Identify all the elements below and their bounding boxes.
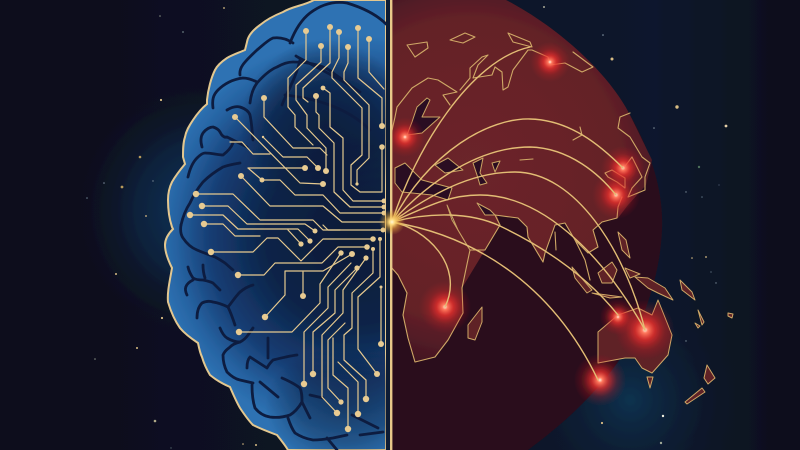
lower right halo (480, 270, 800, 450)
globe ocean (391, 0, 662, 450)
islands and australasia (468, 232, 733, 404)
brain silhouette (165, 0, 386, 450)
brain upper shading (247, 44, 386, 182)
circuit nodes (187, 24, 386, 432)
eurasia and africa land (391, 0, 652, 362)
coastlines (391, 33, 650, 362)
connection arcs (392, 47, 645, 380)
stars (86, 6, 727, 449)
brain lower shading (272, 351, 386, 450)
gold line (390, 0, 392, 450)
circuit traces (190, 27, 384, 429)
panel: left brain (164, 0, 386, 450)
divider: dark strip beside line (386, 0, 390, 450)
brain folds (181, 2, 386, 450)
central glowing hub (379, 209, 405, 235)
panel: right globe (385, 0, 733, 450)
inland seas (395, 98, 500, 250)
glowing hotspots (385, 42, 675, 406)
brain halo (0, 0, 400, 450)
